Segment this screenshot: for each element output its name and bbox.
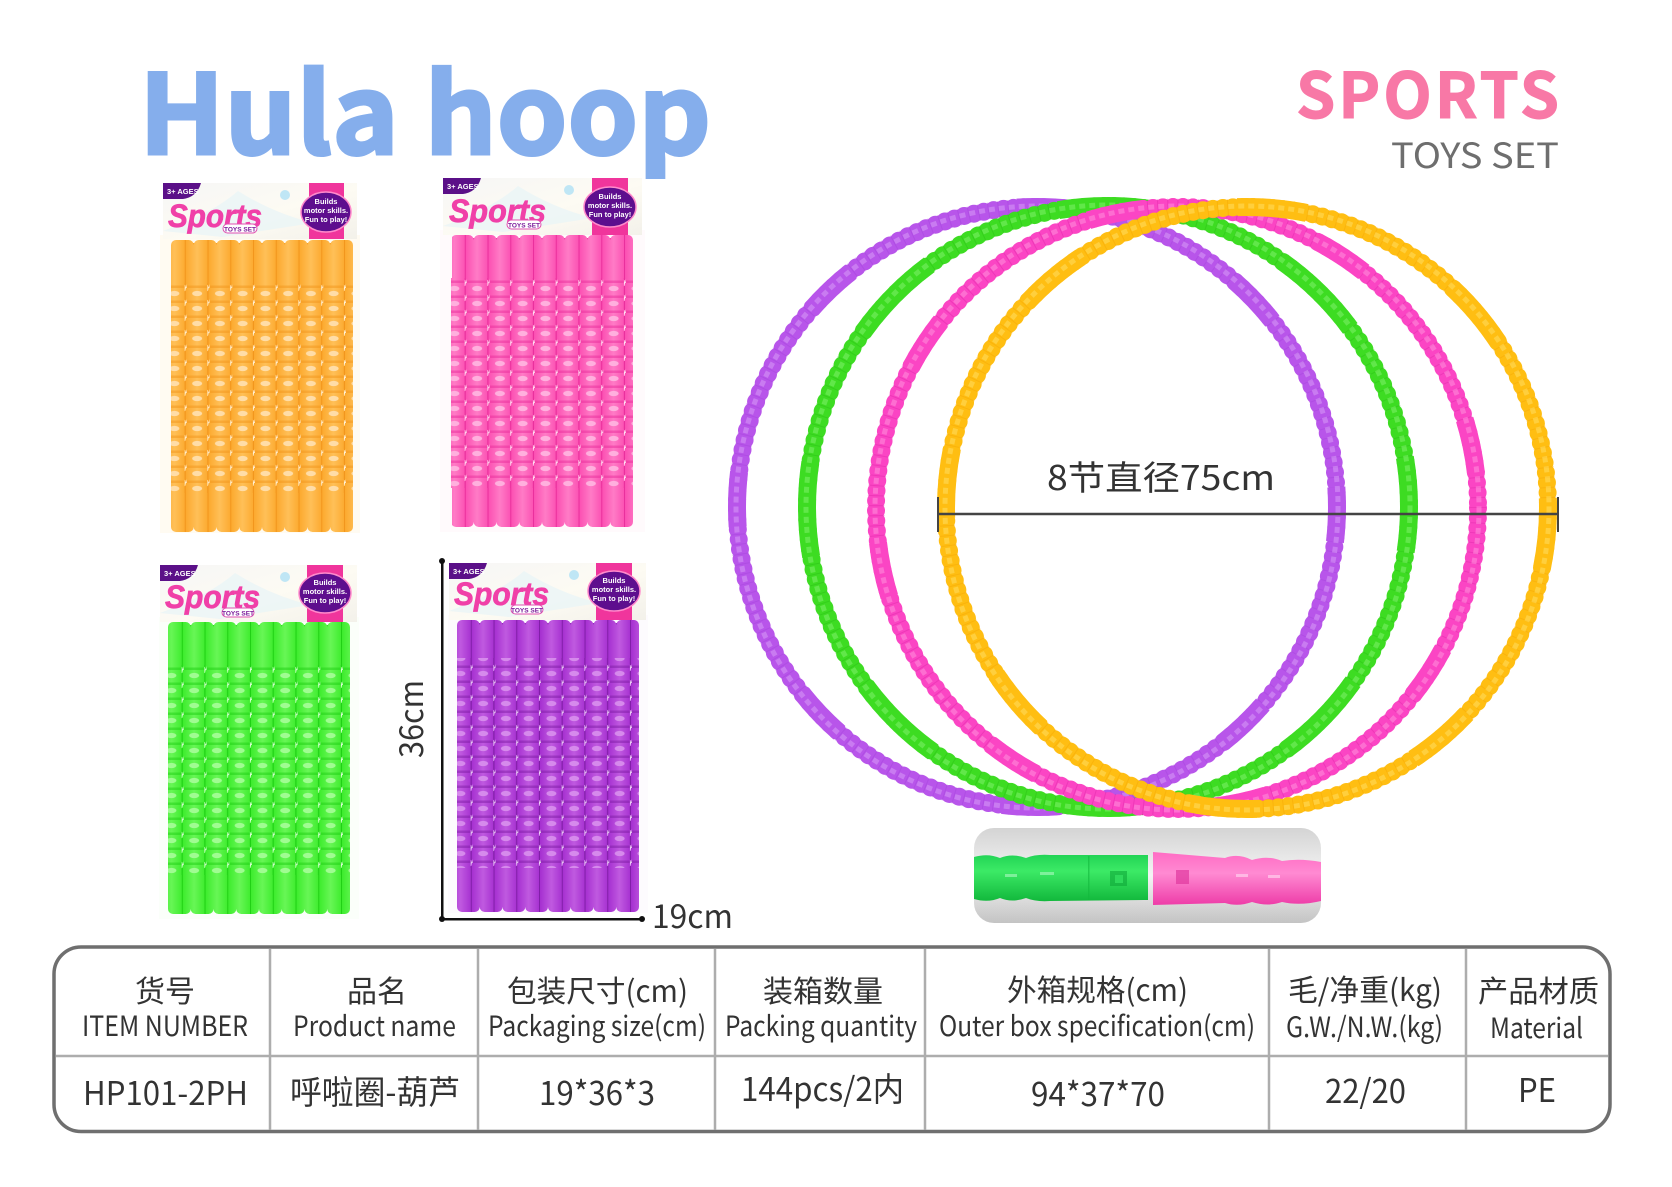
column: material: Material: [1490, 1007, 1583, 1047]
column: item number: ITEM NUMBER: [82, 1005, 248, 1045]
hoops: four overlapping hula hoops: [736, 205, 1549, 810]
column: product name: 品名: [347, 967, 407, 1011]
package header card: [160, 565, 357, 622]
column: packaging size: 包装尺寸(cm): [507, 967, 688, 1011]
column: gross and net weight: 22/20: [1325, 1065, 1406, 1113]
package header card: TOYS SET: [508, 222, 540, 230]
package header card: [443, 178, 642, 235]
column: product name: 呼啦圈-葫芦: [290, 1066, 460, 1114]
column: packaging size: 19*36*3: [539, 1067, 655, 1115]
package header card: Sports: [168, 198, 262, 234]
hoop: yellow: [945, 206, 1549, 810]
subheading: TOYS SET: TOYS SET: [1391, 128, 1559, 179]
column: packaging size: Packaging size(cm): [488, 1005, 706, 1045]
package header card: TOYS SET: [222, 610, 254, 618]
column: packaging size: [488, 967, 706, 1115]
hoop: pink: [875, 206, 1479, 810]
label: package width 19cm: 19cm: [652, 892, 733, 938]
column: packing quantity: 144pcs/2内: [741, 1063, 904, 1111]
product package: pink: [440, 178, 645, 532]
column: item number: [82, 967, 248, 1115]
column: product name: Product name: [293, 1005, 456, 1045]
hoop: purple: [736, 206, 1338, 808]
column: item number: 货号: [135, 967, 195, 1011]
column: product name: [290, 967, 460, 1114]
package header card: [163, 183, 357, 239]
column: gross and net weight: 毛/净重(kg): [1288, 966, 1442, 1010]
connector: green end: [974, 855, 1148, 901]
specification table: [54, 947, 1610, 1132]
package header card: Fun to play!: [304, 596, 346, 605]
heading: SPORTS: SPORTS: [1296, 46, 1559, 137]
package header card: Builds: [599, 192, 621, 201]
label: 8 sections, diameter 75cm: 8节直径75cm: [1047, 451, 1275, 500]
package header card: Sports: [454, 576, 549, 612]
product package: purple: [448, 563, 648, 913]
package header card: TOYS SET: [224, 226, 256, 234]
package header card: Sports: [165, 579, 260, 615]
product package: orange: [160, 183, 360, 533]
column: outer box specification: [939, 966, 1255, 1116]
column: outer box specification: 94*37*70: [1031, 1068, 1165, 1116]
package header card: Builds: [314, 578, 336, 587]
package header card: 3+ AGES: [453, 567, 485, 576]
connector: pink end: [1153, 852, 1321, 905]
package header card: Builds: [315, 197, 337, 206]
package header card: motor skills.: [303, 587, 347, 596]
brand heading: SPORTS TOYS SET: [1296, 46, 1559, 179]
package header card: 3+ AGES: [164, 569, 196, 578]
column: material: 产品材质: [1478, 967, 1599, 1011]
package header card: Sports: [449, 193, 546, 229]
product package: green: [159, 565, 359, 919]
package header card: 3+ AGES: [447, 182, 479, 191]
column: item number: HP101-2PH: [83, 1067, 248, 1115]
package header card: Fun to play!: [305, 215, 347, 224]
column: packing quantity: Packing quantity: [725, 1005, 917, 1045]
package header card: TOYS SET: [511, 608, 543, 614]
column: gross and net weight: G.W./N.W.(kg): [1286, 1006, 1443, 1046]
package dimension lines: [439, 558, 645, 922]
column: gross and net weight: [1286, 966, 1443, 1113]
package header card: Fun to play!: [593, 594, 635, 603]
package header card: 3+ AGES: [167, 187, 199, 196]
column: packing quantity: [725, 967, 917, 1111]
column: material: PE: [1518, 1064, 1556, 1112]
title: Hula hoop: [139, 26, 711, 186]
package header card: motor skills.: [588, 201, 632, 210]
package header card: Fun to play!: [589, 210, 631, 219]
column: material: [1478, 967, 1599, 1112]
package header card: motor skills.: [592, 585, 636, 594]
column: outer box specification: Outer box specification(cm): [939, 1005, 1255, 1045]
package header card: motor skills.: [304, 206, 348, 215]
column: packing quantity: 装箱数量: [763, 967, 883, 1011]
column: outer box specification: 外箱规格(cm): [1007, 966, 1188, 1010]
label: package height 36cm: 36cm: [387, 680, 433, 758]
connector detail photo: [974, 828, 1321, 923]
table frame and dividers: [54, 947, 1610, 1132]
package header card: Builds: [603, 576, 625, 585]
diameter measure line: [938, 497, 1558, 532]
hoop: green: [806, 205, 1410, 809]
package header card: [449, 563, 646, 620]
